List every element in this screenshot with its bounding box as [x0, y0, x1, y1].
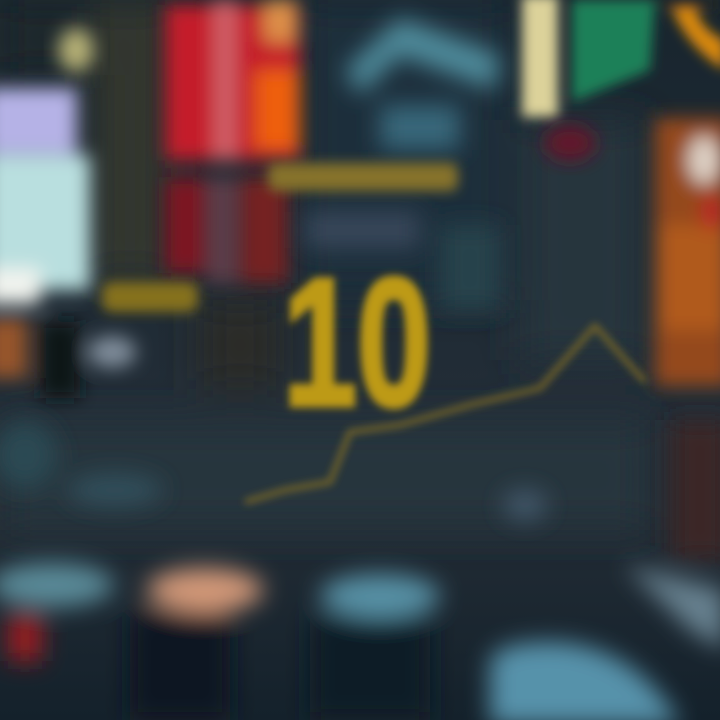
- panel: dark buildings: [0, 0, 650, 530]
- label bar: [102, 282, 198, 312]
- panel: teal building: [305, 18, 500, 310]
- panel: left pale billboard: [0, 88, 136, 398]
- icon: yellow lamp: [58, 28, 94, 72]
- big number: 10: [283, 240, 431, 444]
- panel: red billboard: [165, 0, 300, 283]
- panel: top right signs: [522, 0, 720, 117]
- sign: dark red glow: [544, 125, 596, 161]
- panel: right orange billboard: [655, 118, 720, 386]
- line chart: [245, 326, 645, 502]
- panel: bottom street objects: [0, 420, 720, 720]
- heading bar: [268, 163, 458, 191]
